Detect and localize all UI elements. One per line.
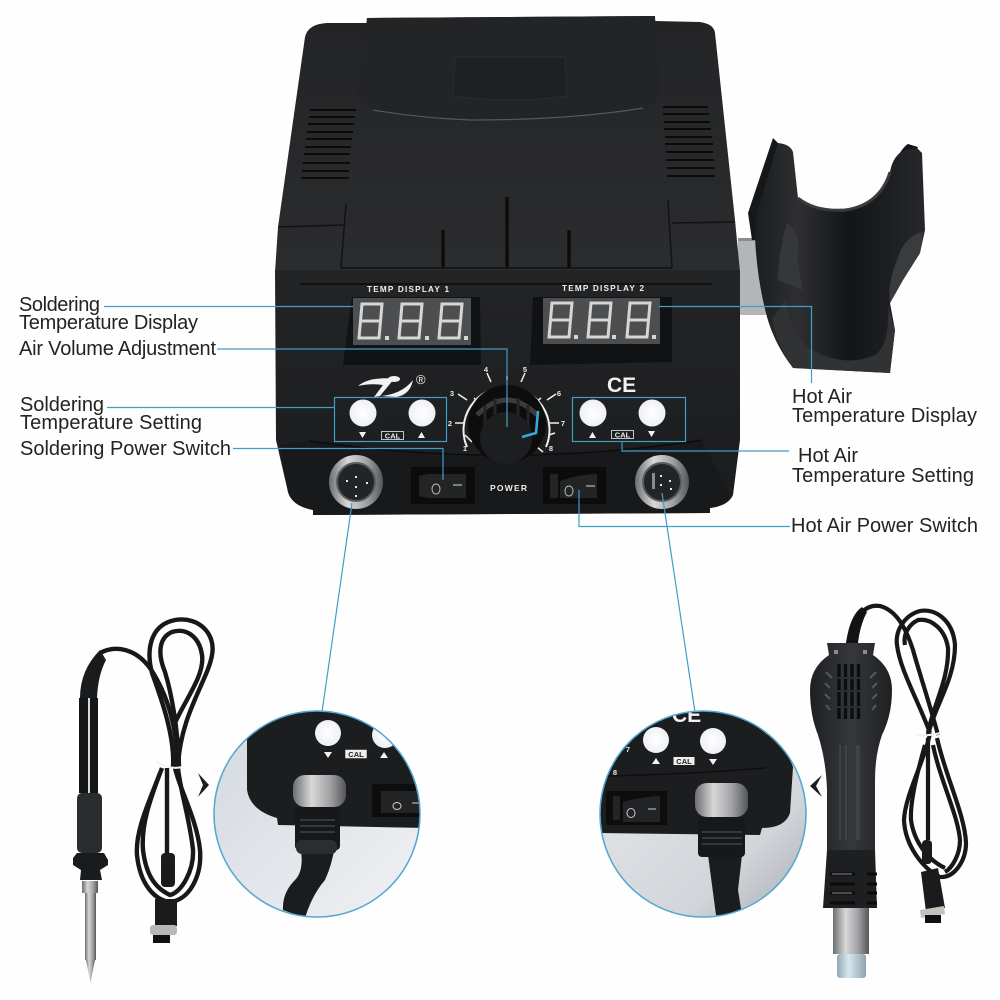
- gun screws: [834, 650, 867, 654]
- labels right: Hot Air: [798, 445, 858, 467]
- gun tip: [837, 954, 866, 978]
- iron cable: [100, 619, 213, 902]
- gun vents: [837, 664, 862, 719]
- gun cable tie: [917, 733, 940, 735]
- zoom circle right: 8: [613, 768, 617, 777]
- left connector: [329, 455, 383, 509]
- dial numbers: 4: [484, 365, 489, 374]
- right connector: [635, 455, 689, 509]
- gun cable: [853, 606, 966, 877]
- labels right: Temperature Setting: [792, 465, 974, 487]
- gun plug: [920, 840, 945, 923]
- labels left: Soldering Power Switch: [20, 438, 231, 460]
- zoom circle right: 7: [626, 745, 630, 754]
- soldering iron: [73, 619, 213, 983]
- labels left: [19, 294, 231, 460]
- zoom circle right: CE: [672, 704, 701, 727]
- zoom circle left: [214, 700, 425, 918]
- hot air gun holder: [748, 138, 925, 373]
- iron handle: [79, 698, 98, 793]
- right power switch: [543, 467, 606, 504]
- right buttons: CAL: [615, 430, 631, 440]
- zoom circle left: CAL: [348, 750, 364, 759]
- gun side chevrons: [825, 672, 877, 710]
- chevron right: [810, 775, 822, 797]
- dial numbers: 8: [549, 444, 553, 453]
- gun body: [810, 643, 892, 853]
- station body: [275, 16, 925, 515]
- cable tie: [157, 762, 182, 768]
- dial numbers: 7: [561, 419, 565, 428]
- lid: [358, 16, 660, 120]
- gun ribs: [840, 745, 859, 840]
- right display: [530, 297, 672, 365]
- labels right: Temperature Display: [792, 405, 977, 427]
- callout lines: [104, 306, 812, 712]
- left buttons: [350, 400, 436, 440]
- dial numbers: 2: [448, 419, 452, 428]
- left power switch: [411, 467, 475, 504]
- front panel: [275, 270, 740, 515]
- gun strain relief: [846, 607, 867, 643]
- labels left: Temperature Display: [19, 312, 198, 334]
- dial numbers: 6: [557, 389, 561, 398]
- labels left: Air Volume Adjustment: [19, 338, 216, 360]
- hot air gun: [810, 606, 966, 978]
- dial numbers: [448, 365, 565, 453]
- labels right: Hot Air: [792, 386, 852, 408]
- zoom circle right: [595, 700, 806, 917]
- left buttons: CAL: [385, 432, 401, 440]
- brand logo: [358, 372, 426, 397]
- gun collar: [823, 850, 877, 908]
- chevron left: [198, 773, 209, 797]
- left display: [343, 297, 481, 365]
- dial arc and ticks: [464, 387, 550, 447]
- labels right: [791, 386, 978, 537]
- right buttons: [580, 400, 666, 440]
- labels left: Temperature Setting: [20, 412, 202, 434]
- right vents: [663, 107, 715, 176]
- iron plug: [150, 853, 177, 943]
- gun nozzle: [833, 908, 869, 954]
- air volume dial: [448, 365, 565, 464]
- ribs: [443, 197, 569, 268]
- iron strain relief: [80, 650, 106, 698]
- power label: POWER: [490, 483, 527, 493]
- top cover: [275, 16, 740, 272]
- zoom circle right: CAL: [676, 757, 692, 766]
- left display label: TEMP DISPLAY 1: [367, 285, 449, 294]
- dial numbers: 5: [523, 365, 527, 374]
- knob: [468, 385, 546, 463]
- iron nut and tip: [82, 881, 98, 893]
- dial numbers: 3: [450, 389, 454, 398]
- left vents: [301, 110, 356, 178]
- labels left: Soldering: [20, 394, 104, 416]
- holder bracket: [738, 238, 766, 315]
- dial numbers: 1: [463, 444, 467, 453]
- labels right: Hot Air Power Switch: [791, 515, 978, 537]
- blue indicator: [522, 411, 538, 437]
- right display label: TEMP DISPLAY 2: [562, 284, 644, 293]
- CE mark: CE: [607, 374, 636, 397]
- labels left: Soldering: [19, 294, 100, 316]
- brand logo: ®: [416, 372, 426, 387]
